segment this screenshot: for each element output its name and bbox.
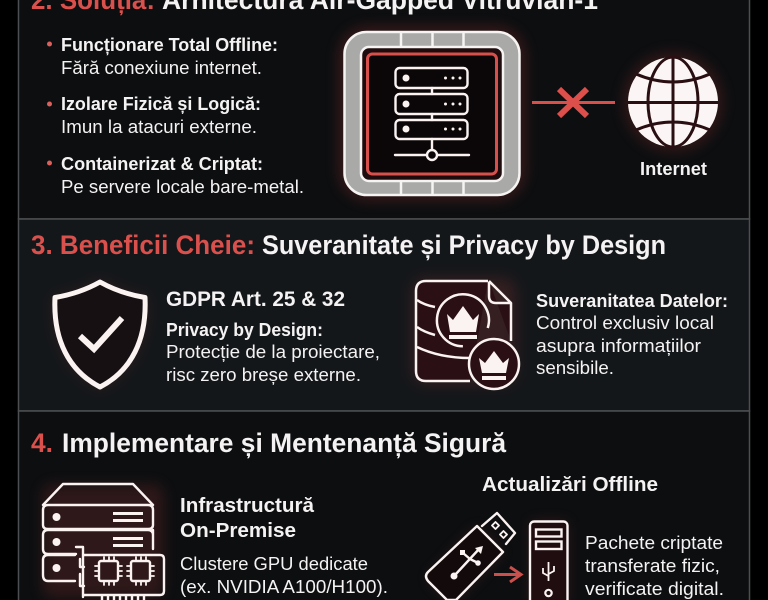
panel: solution [18, 0, 750, 219]
icon: severed connection [532, 89, 615, 116]
bullet list: solution features: Containerizat & Criptat: [61, 154, 263, 174]
heading: section 4: Implementare și Mentenanță Sigură [62, 428, 507, 458]
bullet list: solution features: Izolare Fizică și Logică: [61, 94, 261, 114]
text: GDPR [166, 288, 380, 385]
heading: section 3 [31, 230, 666, 260]
text: on-premise infrastructure: On-Premise [180, 520, 296, 542]
text: offline update description [585, 533, 724, 599]
heading: section 4: 4. [31, 428, 53, 458]
icon: server inside firewall [338, 26, 526, 201]
text: offline update description: verificate digital. [585, 579, 724, 599]
text: GDPR: Protecție de la proiectare, [166, 342, 380, 362]
text: data sovereignty: Suveranitatea Datelor: [536, 291, 728, 311]
text: on-premise infrastructure [180, 495, 388, 597]
panel: benefits [18, 219, 750, 411]
label: internet: Internet [640, 159, 707, 179]
bullet list: solution features: Fără conexiune internet. [61, 58, 262, 78]
text: on-premise infrastructure: (ex. NVIDIA A100/H100). [180, 577, 388, 597]
panel: implementation [18, 411, 750, 600]
text: data sovereignty: sensibile. [536, 358, 614, 378]
text: data sovereignty: asupra informațiilor [536, 336, 701, 356]
icon: server rack with GPU card [42, 484, 164, 600]
icon: data sovereignty [412, 278, 519, 389]
text: on-premise infrastructure: Clustere GPU dedicate [180, 554, 368, 574]
heading: section 3: 3. Beneficii Cheie: [31, 230, 255, 260]
text: GDPR: risc zero breșe externe. [166, 365, 361, 385]
text: data sovereignty [536, 291, 728, 378]
text: offline update description: Pachete criptate [585, 533, 723, 553]
bullet list: solution features: Funcționare Total Offline: [61, 35, 278, 55]
heading: section 3: Suveranitate și Privacy by Design [262, 230, 666, 260]
heading: offline updates: Actualizări Offline [482, 474, 658, 496]
arrow: USB to server [494, 567, 521, 582]
text: data sovereignty: Control exclusiv local [536, 313, 714, 333]
bullet list: solution features: Imun la atacuri externe. [61, 117, 257, 137]
text: GDPR: GDPR Art. 25 & 32 [166, 288, 345, 311]
icon: globe [623, 52, 723, 152]
text: offline update description: transferate fizic, [585, 556, 720, 576]
icon: tower server [530, 521, 568, 600]
bullet list: solution features: Pe servere locale bare-metal. [61, 177, 304, 197]
bullet list: solution features [47, 35, 304, 197]
icon: USB drive [426, 513, 515, 600]
text: on-premise infrastructure: Infrastructură [180, 495, 315, 517]
text: GDPR: Privacy by Design: [166, 320, 323, 340]
icon: shield with check [54, 280, 146, 388]
